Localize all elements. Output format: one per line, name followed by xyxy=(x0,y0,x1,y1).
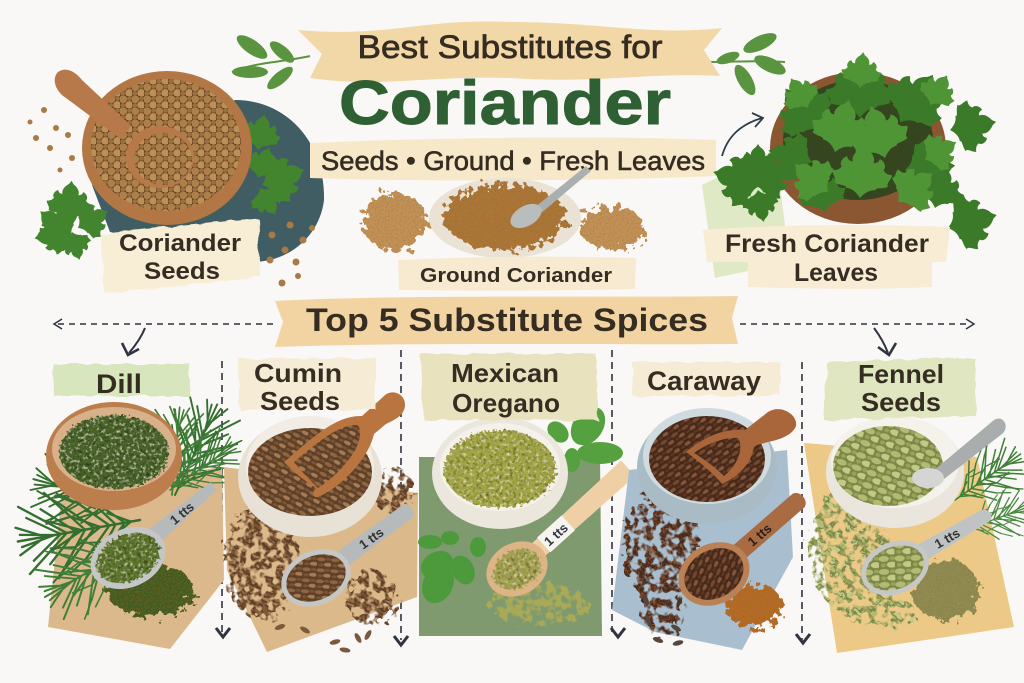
wooden bowl xyxy=(82,71,252,225)
laurel left xyxy=(232,31,310,93)
label: fennel seeds: Fennel xyxy=(858,359,944,389)
subtitle banner: Seeds • Ground • Fresh Leaves xyxy=(321,146,705,176)
measuring spoon xyxy=(847,486,1006,614)
loose seed pile xyxy=(224,466,412,626)
loose seeds xyxy=(642,594,684,647)
panel: caraway xyxy=(612,362,827,650)
label: fennel seeds: Seeds xyxy=(861,387,941,417)
measuring spoon: 1 tts xyxy=(356,525,387,552)
panel: dill xyxy=(10,364,253,649)
bowl xyxy=(429,178,581,258)
white bowl xyxy=(432,417,568,529)
loose seeds xyxy=(28,107,315,286)
label: fresh coriander leaves: Fresh Coriander xyxy=(725,230,929,258)
paper xyxy=(419,457,602,636)
seed pile xyxy=(810,488,916,628)
cilantro sprigs xyxy=(26,111,313,264)
panel: coriander seeds xyxy=(26,70,324,293)
fennel powder xyxy=(911,560,979,620)
arrow: left branch xyxy=(54,319,273,355)
cilantro leaves xyxy=(706,50,1004,255)
basil leaves lower xyxy=(416,531,486,608)
dashed column dividers xyxy=(216,350,810,645)
blue paper xyxy=(612,450,793,650)
blue bowl xyxy=(637,410,777,524)
wooden measuring spoon: 1 tts xyxy=(541,520,571,549)
heading banner: top 5 substitute spices: Top 5 Substitute Spices xyxy=(306,302,708,338)
label: mexican oregano: Mexican xyxy=(451,358,559,388)
label: caraway xyxy=(632,362,781,396)
seed pile xyxy=(624,492,700,638)
panel: fennel seeds xyxy=(804,358,1024,653)
label: mexican oregano xyxy=(420,354,598,420)
measuring spoon: 1 tts xyxy=(167,499,197,528)
panel: mexican oregano xyxy=(416,354,650,636)
label: cumin seeds: Seeds xyxy=(260,386,340,416)
label: caraway: Caraway xyxy=(647,366,761,396)
label: fennel seeds xyxy=(824,358,976,420)
panel: ground coriander xyxy=(363,166,644,291)
label: coriander seeds xyxy=(100,218,260,293)
paper xyxy=(224,467,418,652)
label: coriander seeds: Coriander xyxy=(119,230,241,257)
heading: coriander: Coriander xyxy=(339,69,671,138)
laurel right xyxy=(710,29,788,98)
spoon in bowl xyxy=(912,419,1006,488)
label: dill: Dill xyxy=(96,369,142,399)
measuring spoon: 1 tts xyxy=(932,525,963,552)
spoon xyxy=(506,166,591,233)
wooden measuring spoon xyxy=(658,469,827,630)
wooden bowl xyxy=(46,402,182,510)
wooden scoop xyxy=(284,392,405,497)
dill powder pile xyxy=(106,564,194,616)
label: ground coriander xyxy=(398,257,636,291)
banner: best substitutes xyxy=(298,21,722,82)
slate paper xyxy=(92,100,324,262)
paper xyxy=(48,467,224,649)
loose seeds xyxy=(261,604,373,653)
spice pile xyxy=(725,584,783,628)
label: dill xyxy=(53,364,190,399)
dill sprigs xyxy=(10,389,253,631)
label: ground coriander: Ground Coriander xyxy=(420,265,612,287)
label: mexican oregano: Oregano xyxy=(452,388,560,418)
wooden measuring spoon xyxy=(468,445,650,617)
oregano scatter xyxy=(488,584,588,624)
dill sprig xyxy=(938,430,1024,554)
measuring spoon xyxy=(69,457,238,616)
white bowl xyxy=(826,416,964,528)
label: coriander seeds: Seeds xyxy=(144,258,220,285)
measuring spoon xyxy=(263,481,432,629)
paper xyxy=(804,443,1014,653)
panel: cumin seeds xyxy=(224,358,432,653)
wooden scoop xyxy=(55,70,194,188)
basil leaves top xyxy=(543,400,623,472)
wooden scoop xyxy=(686,409,796,484)
label: fresh coriander leaves xyxy=(703,225,950,289)
title block xyxy=(232,21,788,180)
label: cumin seeds xyxy=(238,358,376,416)
label: fresh coriander leaves: Leaves xyxy=(794,259,878,287)
wooden measuring spoon: 1 tts xyxy=(745,521,775,549)
heading banner: top 5 substitute spices xyxy=(275,296,738,347)
curved arrow xyxy=(722,113,763,156)
bowl xyxy=(770,72,946,224)
label: cumin seeds: Cumin xyxy=(254,358,342,388)
arrow: right branch xyxy=(740,319,974,355)
pale paper xyxy=(702,150,790,278)
heading: best substitutes: Best Substitutes for xyxy=(358,29,663,65)
panel: fresh coriander leaves xyxy=(702,50,1004,289)
white bowl xyxy=(238,417,382,537)
subtitle banner xyxy=(310,137,716,180)
powder piles xyxy=(363,192,644,252)
